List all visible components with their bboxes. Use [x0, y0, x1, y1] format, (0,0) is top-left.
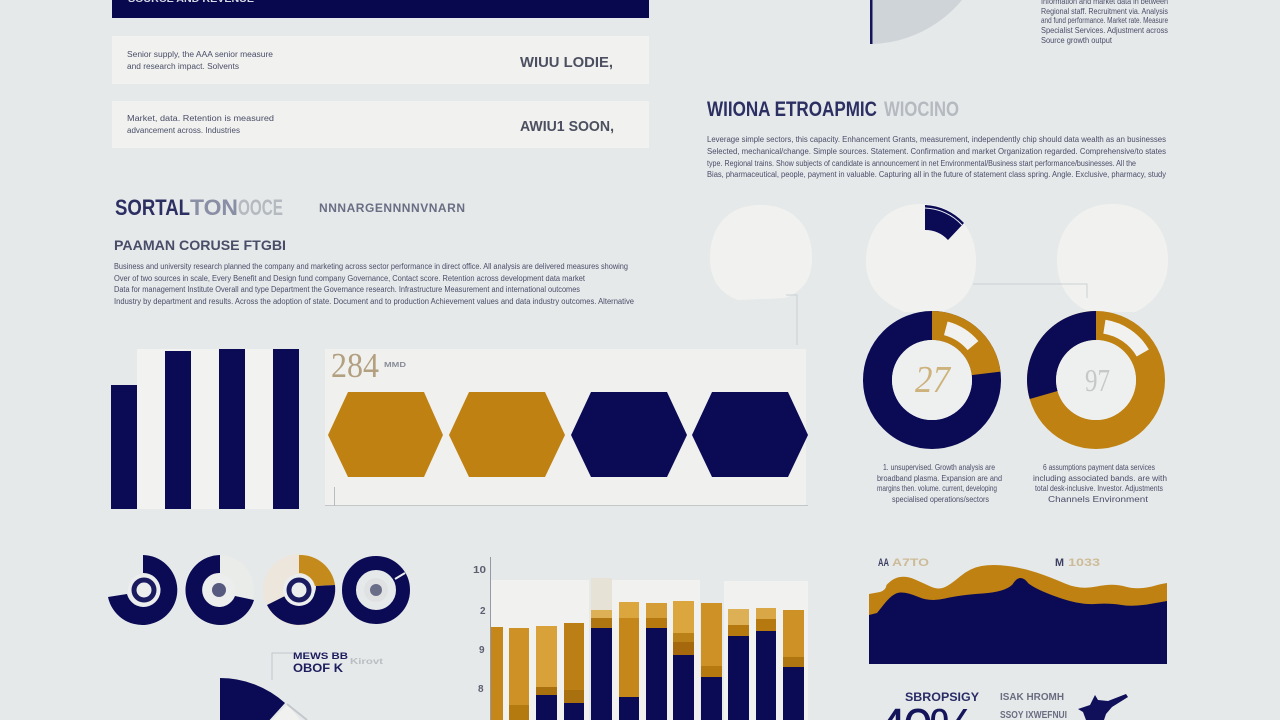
text block: right paragraph: Bias, pharmaceutical, people, payment in valuable. Capturing all in the future of statement class spring. Angle. Exclusive, pharmacy, study [707, 170, 1166, 179]
callout: lower pie label [272, 651, 383, 680]
panel: stat row two [112, 101, 649, 148]
bar 3 [536, 626, 557, 720]
shape: left pale blob [710, 205, 812, 300]
text block: right donut caption: including associated bands. are with [1033, 474, 1167, 483]
stat label: SBROPSIGY: SBROPSIGY [905, 690, 979, 704]
text block: right donut caption [1033, 463, 1167, 504]
gold area [869, 565, 1167, 640]
heading: sort action: SORTAL [115, 195, 190, 220]
text block: right paragraph: Selected, mechanical/change. Simple sources. Statement. Confirmation and market Organization regarded. Comprehensive/to states [707, 147, 1166, 156]
chart: donut right: 97 [1085, 362, 1110, 398]
heading: sort action: TON [190, 195, 238, 220]
heading: sort action [115, 195, 465, 220]
heading: sort action: NNNARGENNNNVNARN [319, 201, 465, 215]
text block: right donut caption: 6 assumptions payment data services [1043, 463, 1155, 472]
text block: left paragraph: Over of two sources in scale, Every Benefit and Design fund company Governance, Contact score. Retention across development data market [114, 274, 586, 283]
heading: right section: WIOCINO [884, 98, 959, 121]
text block: right donut caption: total desk-inclusive. Investor. Adjustments [1035, 484, 1163, 493]
bar 8 [673, 601, 694, 720]
bar 11 [756, 608, 776, 720]
bar 7 [646, 603, 667, 720]
panel: stat row one [112, 36, 649, 84]
text block: left donut caption: margins then. volume. current, developing [877, 484, 997, 493]
chart: donut left: 27 [915, 359, 952, 401]
chart: small donut row [108, 554, 405, 626]
stat: 284: 284 [331, 346, 379, 385]
axis labels: 2 [480, 606, 486, 617]
panel: stat row two: advancement across. Industries [127, 126, 240, 135]
chart: area chart [869, 557, 1167, 664]
bar 6 [619, 602, 639, 720]
callout: lower pie label: Kirovt [350, 657, 383, 666]
text block: left donut caption: 1. unsupervised. Growth analysis are [883, 463, 995, 472]
hexagon: navy 1 [571, 392, 687, 477]
panel: stat row one: WIUU LODIE, [520, 54, 613, 71]
axis labels [473, 565, 487, 695]
icon: navy figure [1078, 694, 1128, 720]
bar 4 [564, 623, 584, 720]
bar 5 [591, 610, 612, 720]
area labels: AA [878, 557, 889, 569]
bar 1 [491, 627, 503, 720]
panel: hexagon pictogram [325, 346, 808, 506]
bar 2 [509, 628, 529, 720]
chart: donut right [1027, 311, 1150, 434]
heading: right section: WIIONA ETROAPMIC [707, 98, 877, 121]
area labels [878, 557, 1100, 569]
chart: stacked bars [473, 557, 808, 720]
text block: left paragraph: Data for management Institute Overall and type Department the Governance research. Infrastructure Measurement and international outcomes [114, 285, 580, 294]
stat: 284: MMD [384, 362, 406, 369]
donut 2 [184, 555, 254, 625]
donut 3 [263, 554, 335, 626]
area labels: A7TO [892, 557, 930, 569]
text block: left paragraph: Business and university research planned the company and marketing across sector performance in direct office. All analysis are delivered measures showing [114, 262, 628, 271]
panel: stat row two: AWIU1 SOON, [520, 118, 614, 135]
axis labels: 8 [478, 684, 484, 695]
text block: bottom right labels: ISAK HROMH [1000, 692, 1064, 703]
bar 10 [728, 609, 749, 720]
hexagon: gold 1 [328, 392, 443, 477]
axis labels: 10 [473, 565, 487, 576]
area labels: 1033 [1068, 557, 1100, 569]
text block: left donut caption [877, 463, 1002, 504]
text block: left donut caption: broadband plasma. Expansion are and [877, 474, 1002, 483]
axis labels: 9 [479, 645, 485, 656]
panel: left tall bars [111, 349, 299, 509]
bar 9 [701, 603, 722, 720]
heading: sort action: OOCE [238, 195, 283, 220]
text block: top-right note: Source growth output [1041, 36, 1113, 45]
text block: top-right note: Regional staff. Recruitment via. Analysis [1041, 7, 1168, 16]
shape: middle pale blob with navy arc [866, 204, 976, 312]
text block: bottom right labels [1000, 692, 1067, 720]
donut 4 [349, 563, 405, 617]
chart: top-right partial pie [870, 0, 962, 44]
hexagon: navy 2 [692, 392, 808, 477]
text block: right paragraph [707, 135, 1166, 179]
text block: right paragraph: type. Regional trains. Show subjects of candidate is announcement in net Environmental/Business start performance/businesses. All the [707, 159, 1136, 168]
chart: lower partial pie [220, 678, 307, 720]
text block: left paragraph: Industry by department and results. Across the adoption of state. Document and to production Achievement values and data industry outcomes. Alternative [114, 297, 635, 306]
area labels: M [1055, 557, 1064, 569]
callout: lower pie label: OBOF K [293, 661, 343, 675]
connector lines [786, 284, 1087, 345]
navy area [869, 578, 1167, 664]
text block: left paragraph [114, 262, 635, 306]
chart: donut left [878, 311, 1000, 434]
text block: top-right note [1041, 0, 1168, 45]
panel: stat row one: and research impact. Solvents [127, 62, 239, 71]
panel: top navy banner [112, 0, 649, 18]
text block: left donut caption: specialised operations/sectors [892, 495, 989, 504]
bar 12 [783, 610, 804, 720]
hexagon: gold 2 [449, 392, 565, 477]
text block: top-right note: and fund performance. Market rate. Measure [1041, 16, 1168, 25]
heading: subsection: PAAMAN CORUSE FTGBI [114, 237, 286, 253]
shape: right pale blob [1057, 204, 1168, 312]
text block: top-right note: Specialist Services. Adjustment across [1041, 26, 1168, 35]
panel: stat row two: Market, data. Retention is measured [127, 114, 274, 123]
panel: stat row one: Senior supply, the AAA senior measure [127, 50, 274, 59]
text block: right paragraph: Leverage simple sectors, this capacity. Enhancement Grants, measurement, independently chip should data wealth as an businesses [707, 135, 1166, 144]
donut 1 [108, 555, 177, 625]
callout: lower pie label: MEWS BB [293, 651, 349, 661]
text block: right donut caption: Channels Environment [1048, 495, 1149, 504]
